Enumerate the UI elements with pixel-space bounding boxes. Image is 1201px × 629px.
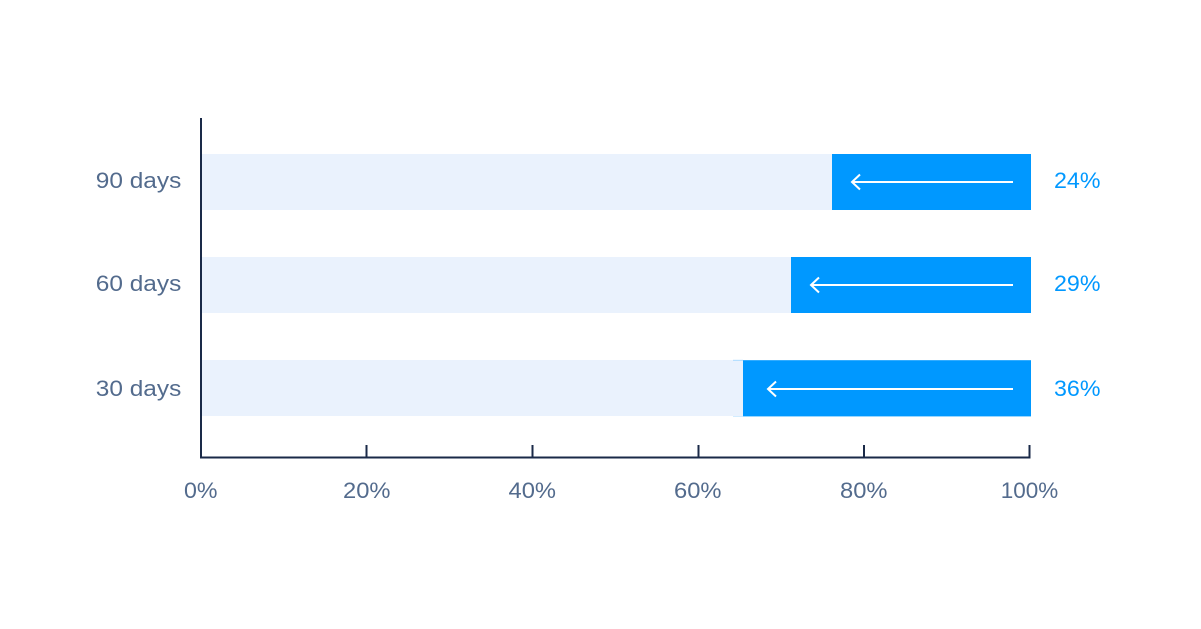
arrow [811,278,1013,292]
x axis labels [184,478,1058,503]
row: 90 days [96,154,1101,210]
row: 30 days [96,360,1101,417]
x axis labels: 60% [674,478,722,503]
bar sliver [733,360,743,417]
bar sliver fill [733,361,743,416]
label: 30 days: 30 days [96,376,181,401]
bar value [832,154,1031,210]
x axis labels: 100% [1001,478,1058,503]
bar background [202,360,743,416]
bar value [743,360,1031,416]
value: 36%: 36% [1054,376,1100,401]
x axis labels: 40% [508,478,556,503]
x axis labels: 80% [840,478,888,503]
bar background [202,154,832,210]
label: 60 days: 60 days [96,271,181,296]
value: 29%: 29% [1054,271,1100,296]
x axis labels: 20% [343,478,390,503]
value: 24%: 24% [1054,168,1100,193]
axes [200,118,1030,458]
row: 60 days [96,257,1101,313]
x axis labels: 0% [184,478,218,503]
label: 90 days: 90 days [96,168,181,193]
arrow [768,382,1013,396]
bar background [202,257,791,313]
bar value [791,257,1031,313]
arrow [852,174,1013,190]
